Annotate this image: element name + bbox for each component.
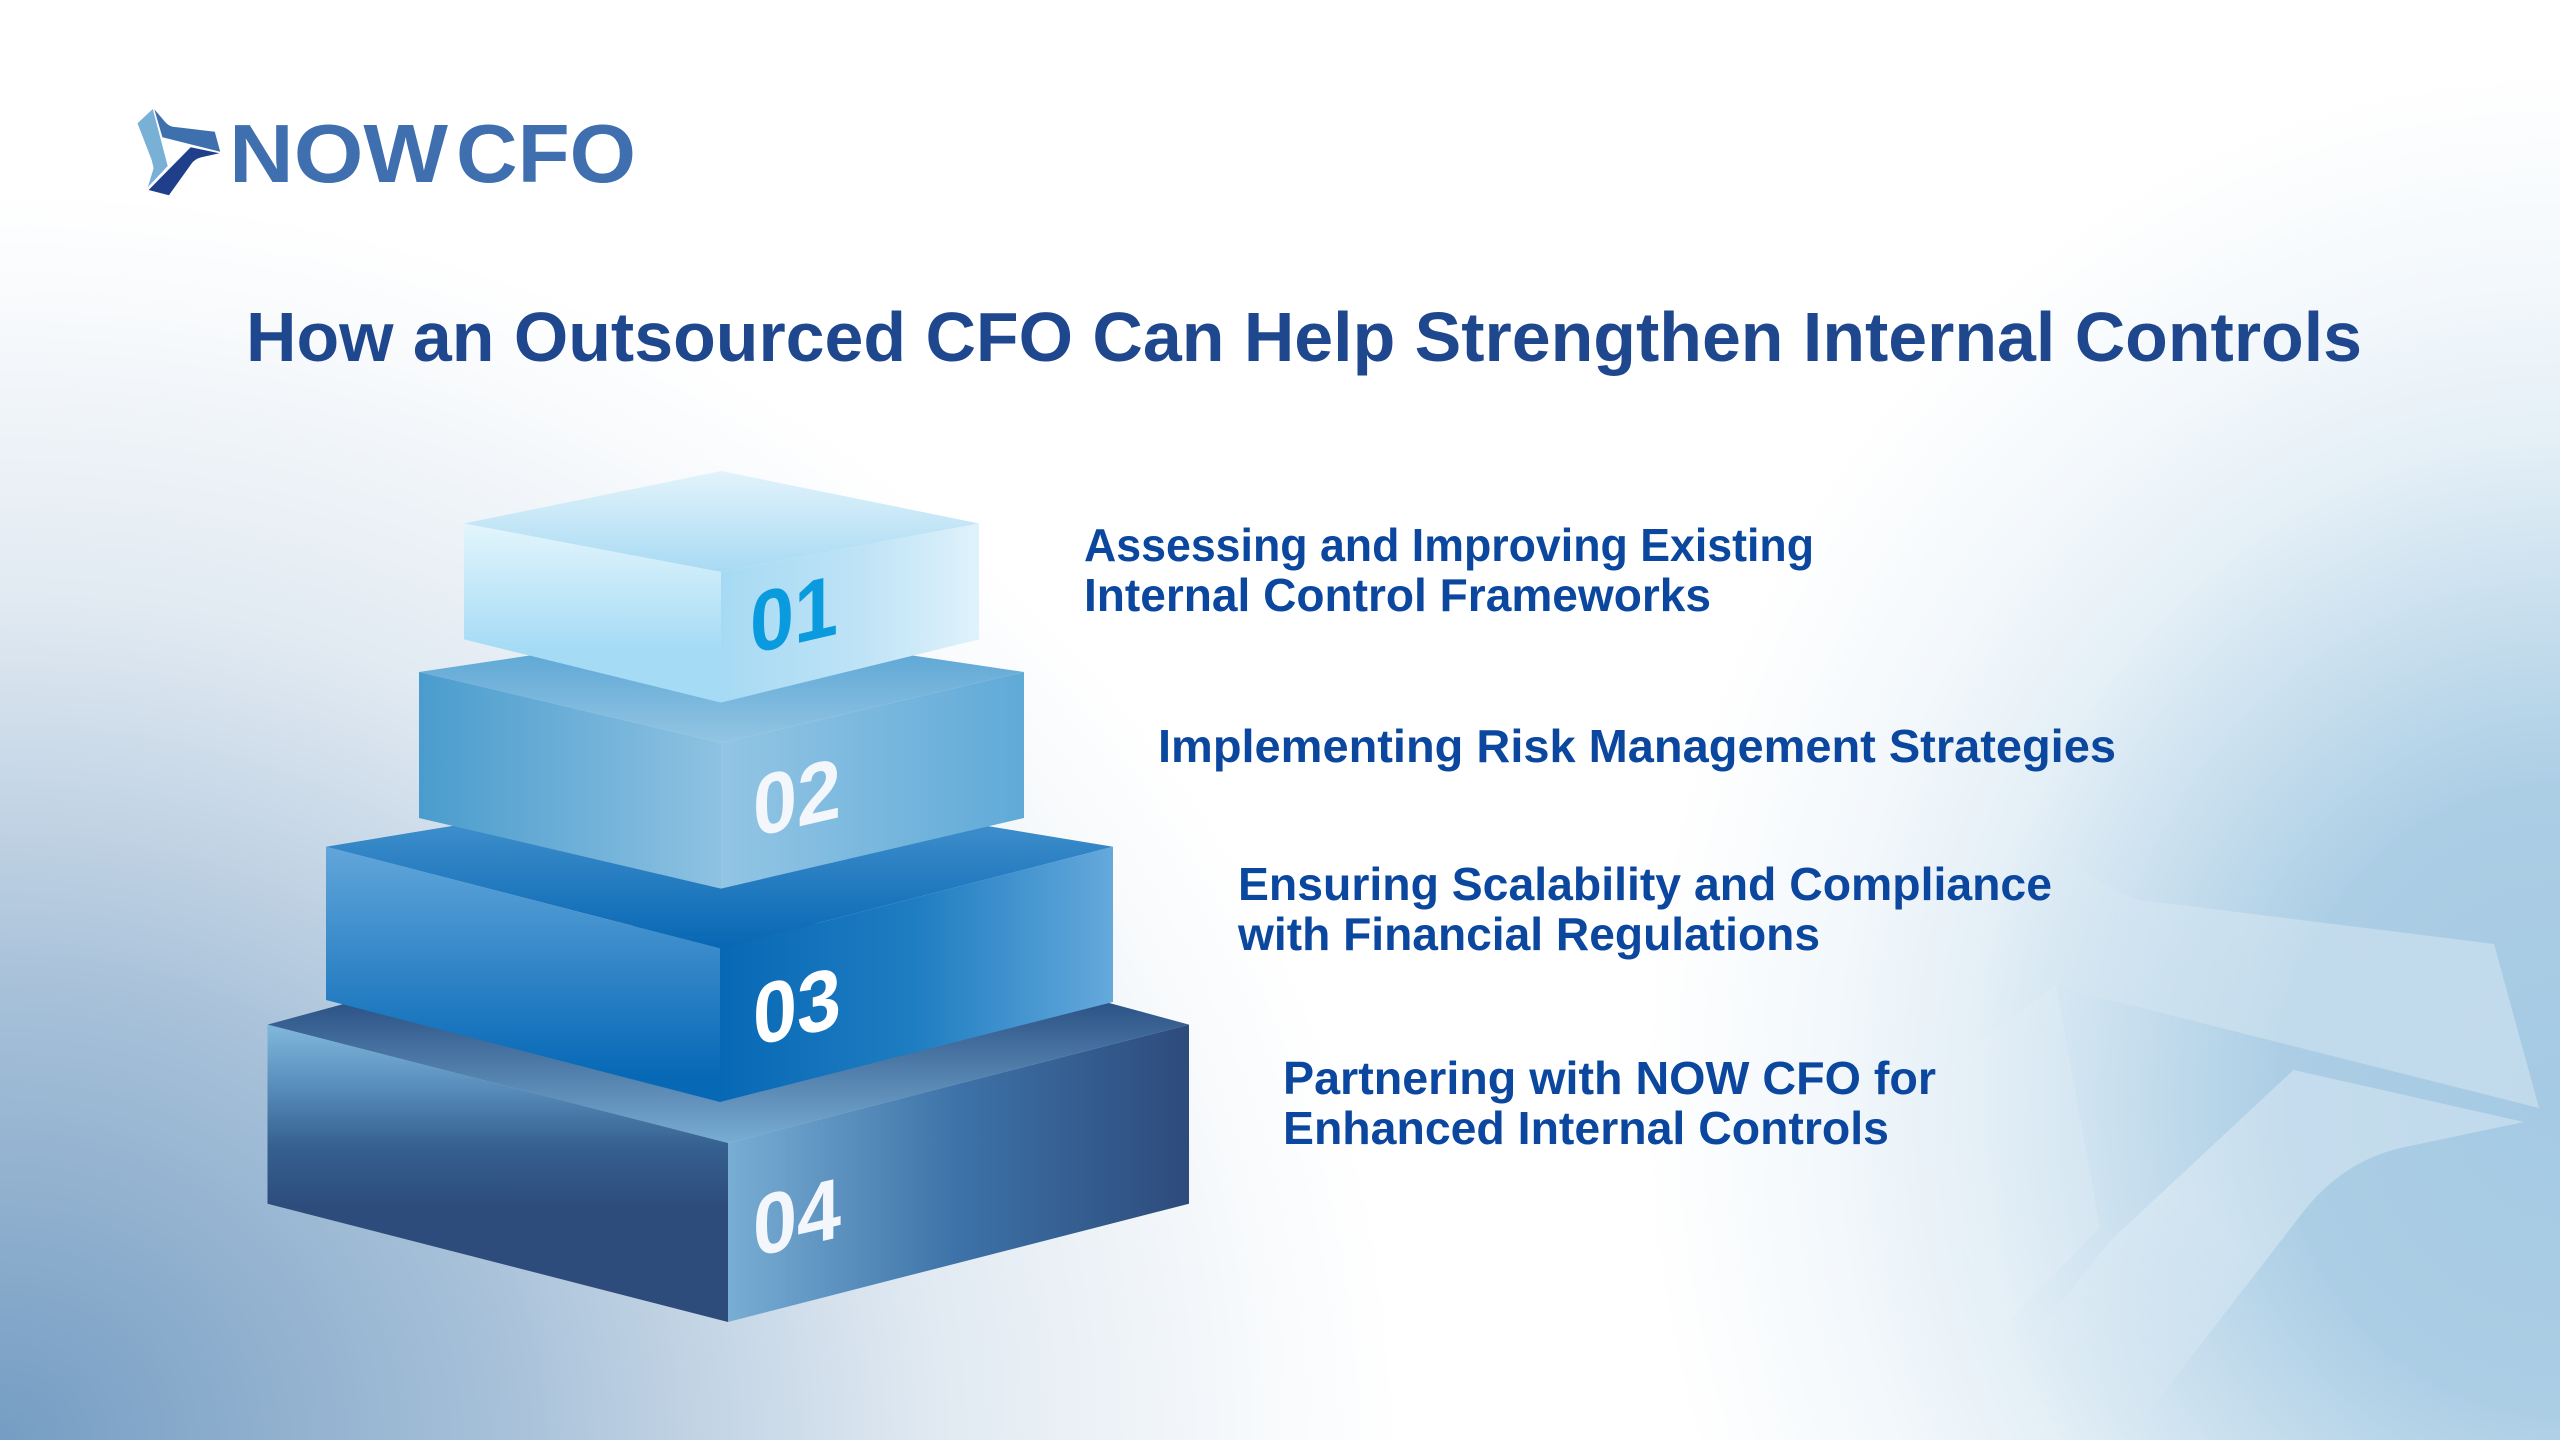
label 01: Assessing and Improving Existing (1084, 519, 1814, 571)
label 03 (1237, 858, 2052, 960)
stacked pyramid chart (268, 471, 1189, 1322)
step 01 block (464, 471, 979, 703)
step 04 block: 04 (753, 1160, 841, 1276)
label 03: Ensuring Scalability and Compliance (1238, 858, 2052, 910)
watermark: logo lower band (1950, 1070, 2524, 1440)
watermark: logo upper band (2051, 826, 2539, 1108)
logo wordmark: CFO (456, 107, 636, 200)
step 04 block (268, 900, 1189, 1322)
watermark: logo left sliver (1900, 985, 2100, 1330)
title: How an Outsourced CFO Can Help Strengthen Internal Controls (246, 298, 2362, 376)
step 03 block: 03 (753, 949, 841, 1065)
step 02 block: 02 (753, 740, 841, 856)
label 04: Partnering with NOW CFO for (1283, 1052, 1936, 1104)
label 01 (1084, 519, 1814, 621)
label 04 (1283, 1052, 1936, 1154)
logo mark (138, 109, 220, 195)
logo wordmark: NOW (229, 107, 449, 200)
step 01 block: 01 (750, 557, 838, 673)
step 03 block (326, 782, 1113, 1102)
label 03: with Financial Regulations (1237, 908, 1820, 960)
label 02: Implementing Risk Management Strategies (1158, 720, 2116, 772)
label 04: Enhanced Internal Controls (1283, 1102, 1889, 1154)
label 01: Internal Control Frameworks (1084, 569, 1711, 621)
step 02 block (419, 627, 1024, 889)
logo (138, 107, 636, 200)
